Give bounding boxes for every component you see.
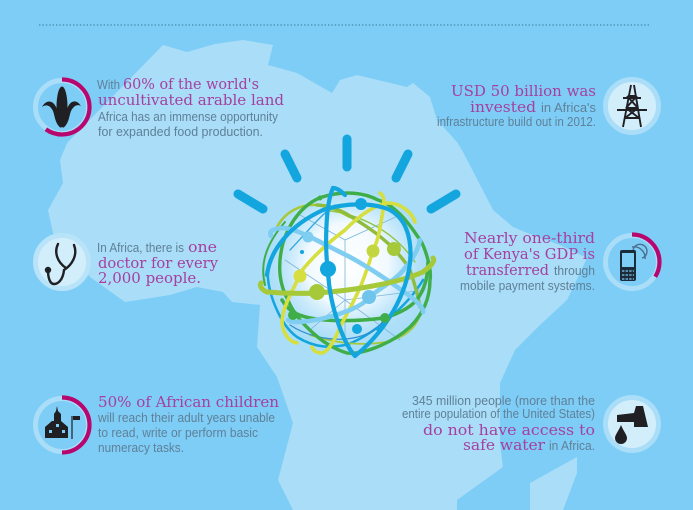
text: infrastructure: USD 50 billion was	[451, 84, 596, 100]
globe: nodes	[288, 196, 401, 334]
text: infrastructure: infrastructure build out in 2012.	[437, 115, 596, 129]
text: infrastructure: in Africa's	[541, 101, 596, 115]
text: children: will reach their adult years unable	[97, 411, 275, 425]
stat: safe water	[402, 392, 658, 454]
text: doctors: one	[188, 240, 217, 256]
icon: stethoscope	[36, 236, 88, 288]
map of Africa	[48, 40, 587, 510]
map: Madagascar	[530, 457, 577, 510]
globe: cyan vertical band	[326, 188, 355, 356]
text: infrastructure: invested	[470, 100, 536, 116]
text: arable land: Africa has an immense opportunity	[98, 110, 279, 124]
text: safe water: in Africa.	[549, 439, 595, 453]
icon: schoolhouse	[34, 398, 90, 452]
text: arable land: 60% of the world's	[123, 77, 259, 93]
text: mobile payments: through	[554, 264, 595, 278]
globe: green ring	[280, 193, 430, 353]
globe: light blue band	[270, 228, 423, 322]
text: arable land: for expanded food production.	[98, 125, 263, 139]
globe: lime band	[260, 258, 434, 293]
text: children: to read, write or perform basic	[98, 426, 258, 440]
icon: power tower	[606, 80, 658, 132]
icon: corn	[34, 80, 90, 134]
text: children: 50% of African children	[98, 395, 279, 411]
text: mobile payments: of Kenya's GDP is	[464, 247, 595, 263]
globe: lower blue ring	[268, 270, 423, 347]
text: arable land: With	[97, 78, 120, 92]
text: children: numeracy tasks.	[98, 441, 184, 455]
text: safe water: safe water	[463, 438, 545, 454]
globe: green lower band	[282, 262, 428, 321]
globe: lime lower arc	[310, 305, 421, 344]
stat: mobile payments	[460, 230, 660, 293]
text: mobile payments: Nearly one-third	[464, 231, 595, 247]
globe: blue band	[267, 204, 410, 356]
globe: olive band	[317, 205, 420, 307]
text: arable land: uncultivated arable land	[98, 93, 284, 109]
text: safe water: do not have access to	[423, 423, 595, 439]
IBM Watson rays	[238, 139, 456, 209]
globe: outer green ring left	[263, 222, 285, 285]
stat: arable land	[34, 76, 288, 139]
stat: doctors	[36, 236, 222, 288]
text: mobile payments: mobile payment systems.	[460, 279, 595, 293]
text: doctors: doctor for every	[98, 256, 219, 272]
icon: mobile phone	[604, 234, 660, 290]
text: safe water: entire population of the United States)	[402, 407, 595, 421]
globe: lime arc top-left	[277, 205, 350, 227]
globe: yellow ring	[282, 193, 415, 353]
stat: infrastructure	[437, 80, 658, 132]
text: doctors: 2,000 people.	[98, 271, 201, 287]
stat: children	[34, 394, 283, 455]
text: safe water: 345 million people (more than the	[412, 394, 595, 408]
globe	[260, 188, 434, 356]
text: doctors: In Africa, there is	[97, 241, 184, 255]
text: mobile payments: transferred	[466, 263, 549, 279]
icon: water tap	[606, 398, 658, 450]
